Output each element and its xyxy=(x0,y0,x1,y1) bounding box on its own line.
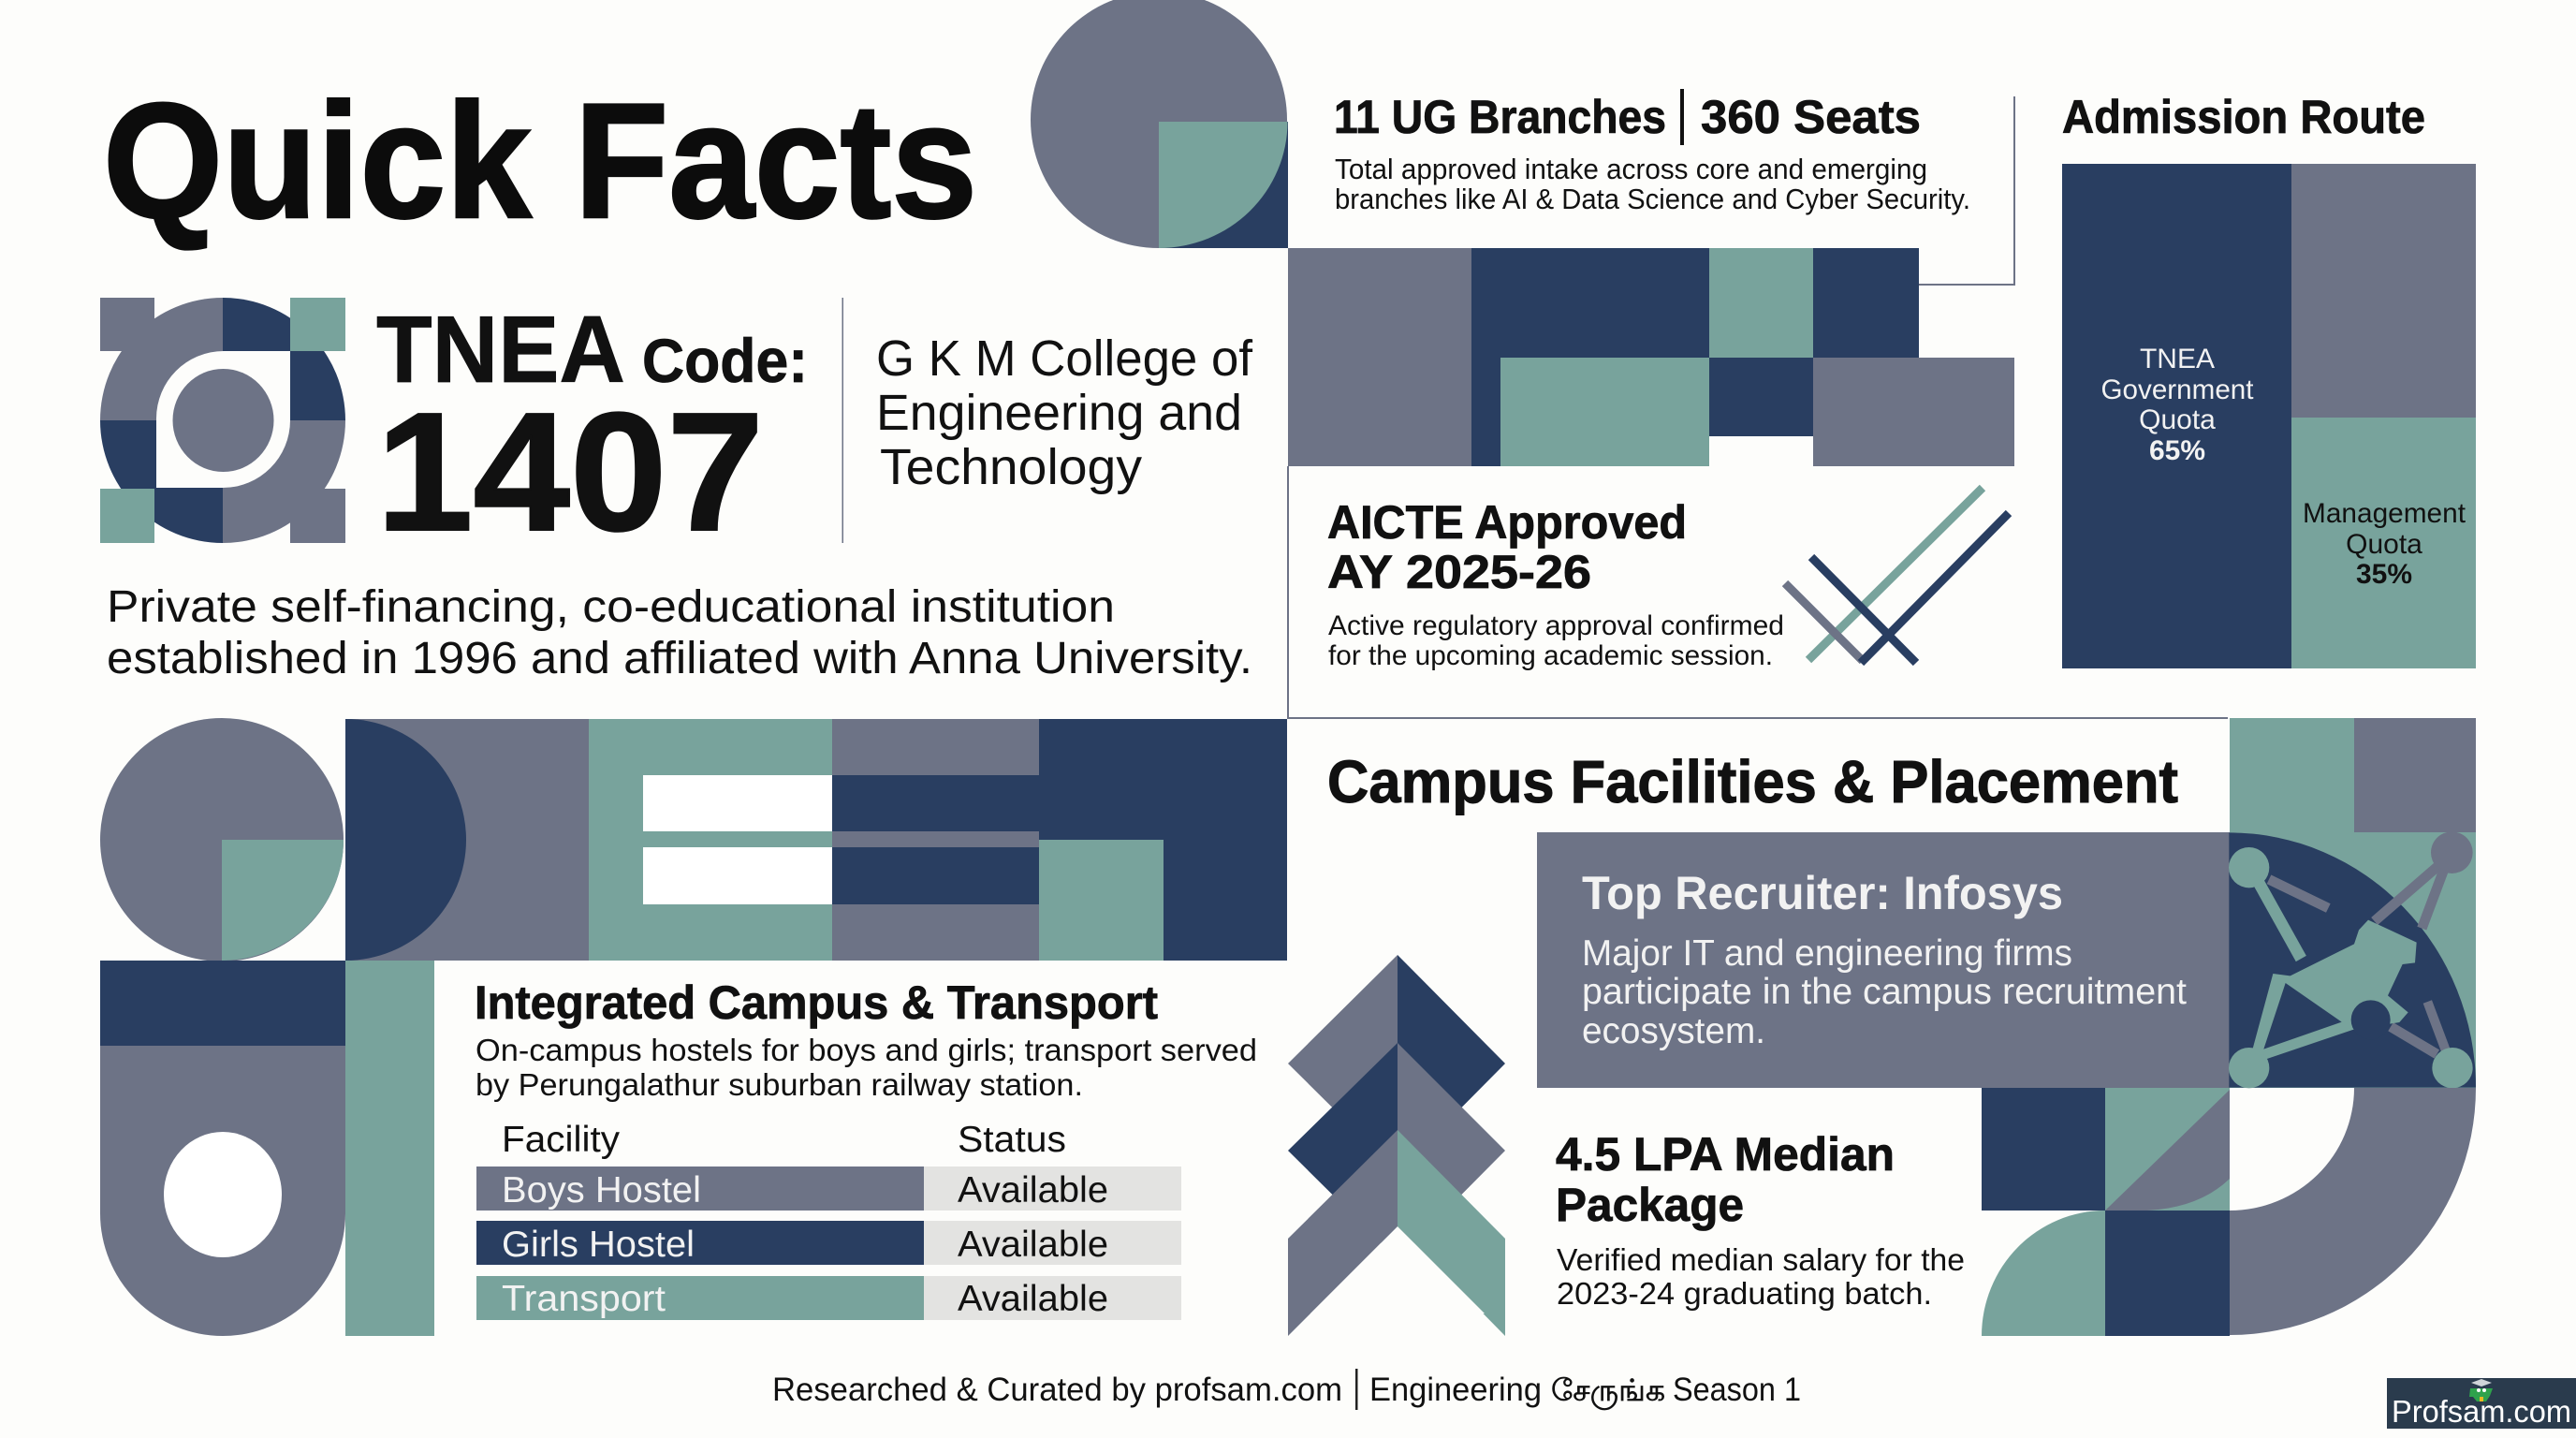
footer credit: Engineering xyxy=(1369,1372,1542,1408)
logo badge: Profsam.com xyxy=(2387,1378,2576,1429)
panel: UG branches and seats: branches like AI & Data Science and Cyber Security. xyxy=(1335,183,1970,215)
panel: UG branches and seats: 360 Seats xyxy=(1701,91,1921,143)
divider line xyxy=(842,298,843,543)
TNEA code block: Code: xyxy=(642,326,808,395)
panel: integrated campus and transport: Integrated Campus & Transport xyxy=(475,976,1158,1029)
panel: top recruiter xyxy=(1537,718,2476,1088)
facility table: Available xyxy=(958,1225,1108,1265)
panel: median package xyxy=(1556,1128,1965,1311)
panel: median package: Verified median salary for the xyxy=(1557,1242,1965,1277)
panel: UG branches and seats: Total approved intake across core and emerging xyxy=(1335,153,1927,185)
description text: established in 1996 and affiliated with Anna University. xyxy=(107,634,1252,683)
facility table: Available xyxy=(958,1279,1108,1319)
description text xyxy=(107,582,1252,683)
panel: integrated campus and transport: by Perungalathur suburban railway station. xyxy=(476,1067,1083,1102)
chart: admission quota split: 35% xyxy=(2356,559,2412,590)
panel: median package: 4.5 LPA Median xyxy=(1556,1128,1895,1181)
mosaic block top xyxy=(1288,248,2014,466)
footer credit xyxy=(772,1369,1801,1410)
title: Quick Facts xyxy=(103,70,977,253)
panel: AICTE approval: AICTE Approved xyxy=(1327,496,1687,549)
decorative circle top xyxy=(1031,0,1288,248)
panel: median package: Package xyxy=(1556,1179,1744,1231)
facility table: Transport xyxy=(502,1279,666,1319)
panel: AICTE approval xyxy=(1288,466,2228,718)
panel: AICTE approval: for the upcoming academic session. xyxy=(1328,640,1773,671)
decorative column left xyxy=(100,961,434,1336)
facility table xyxy=(476,1120,1181,1320)
chart: admission quota split: TNEA xyxy=(2140,344,2215,374)
chart: admission quota split: Quota xyxy=(2346,529,2422,560)
decorative shapes bottom right xyxy=(1982,1088,2476,1336)
heading: admission route: Admission Route xyxy=(2062,91,2425,143)
icon: mascot xyxy=(2469,1379,2493,1401)
footer credit: Season 1 xyxy=(1673,1372,1801,1408)
facility table: Status xyxy=(958,1120,1066,1160)
chart: admission quota split: Management xyxy=(2303,498,2466,529)
chart: admission quota split xyxy=(2062,164,2476,668)
decorative circle bottom left xyxy=(100,718,344,961)
panel: top recruiter: ecosystem. xyxy=(1582,1011,1765,1051)
facility table: Boys Hostel xyxy=(502,1170,701,1211)
icon: TNEA logo mark xyxy=(100,298,345,543)
mosaic band xyxy=(345,719,1287,961)
college name: Technology xyxy=(880,439,1142,495)
panel: AICTE approval: AY 2025-26 xyxy=(1327,546,1591,598)
college name: G K M College of xyxy=(876,330,1253,387)
chart: admission quota split: 65% xyxy=(2149,435,2205,466)
icon: double check marks xyxy=(1785,488,2009,663)
panel: median package: 2023-24 graduating batch. xyxy=(1557,1276,1932,1311)
panel: integrated campus and transport: On-campus hostels for boys and girls; transport served xyxy=(476,1033,1257,1067)
TNEA code block: 1407 xyxy=(376,378,764,566)
college name: Engineering and xyxy=(876,385,1242,441)
panel: top recruiter: Top Recruiter: Infosys xyxy=(1582,867,2063,919)
facility table: Available xyxy=(958,1170,1108,1211)
panel: top recruiter: participate in the campus recruitment xyxy=(1582,972,2187,1012)
heading: campus facilities and placement: Campus Facilities & Placement xyxy=(1327,748,2178,815)
TNEA code block xyxy=(376,298,808,566)
facility table: Facility xyxy=(502,1120,621,1160)
description text: Private self-financing, co-educational institution xyxy=(107,582,1115,632)
footer credit: சேருங்க xyxy=(1551,1373,1665,1410)
footer credit: Researched & Curated by profsam.com xyxy=(772,1372,1342,1408)
icon: recruiter network xyxy=(2229,831,2476,1088)
panel: top recruiter: Major IT and engineering firms xyxy=(1582,933,2072,974)
logo badge: Profsam.com: Profsam.com xyxy=(2392,1394,2571,1429)
icon: stacked chevrons xyxy=(1288,955,1505,1336)
panel: UG branches and seats: 11 UG Branches xyxy=(1334,91,1666,143)
college name xyxy=(876,330,1253,495)
panel: AICTE approval: Active regulatory approval confirmed xyxy=(1328,610,1784,641)
panel: integrated campus and transport xyxy=(475,976,1257,1320)
chart: admission quota split: Quota xyxy=(2139,404,2216,435)
chart: admission quota split: Government xyxy=(2100,374,2254,405)
connector line xyxy=(1918,96,2014,285)
facility table: Girls Hostel xyxy=(502,1225,695,1265)
panel: UG branches and seats xyxy=(1334,89,1970,215)
TNEA code block: TNEA xyxy=(376,298,625,403)
